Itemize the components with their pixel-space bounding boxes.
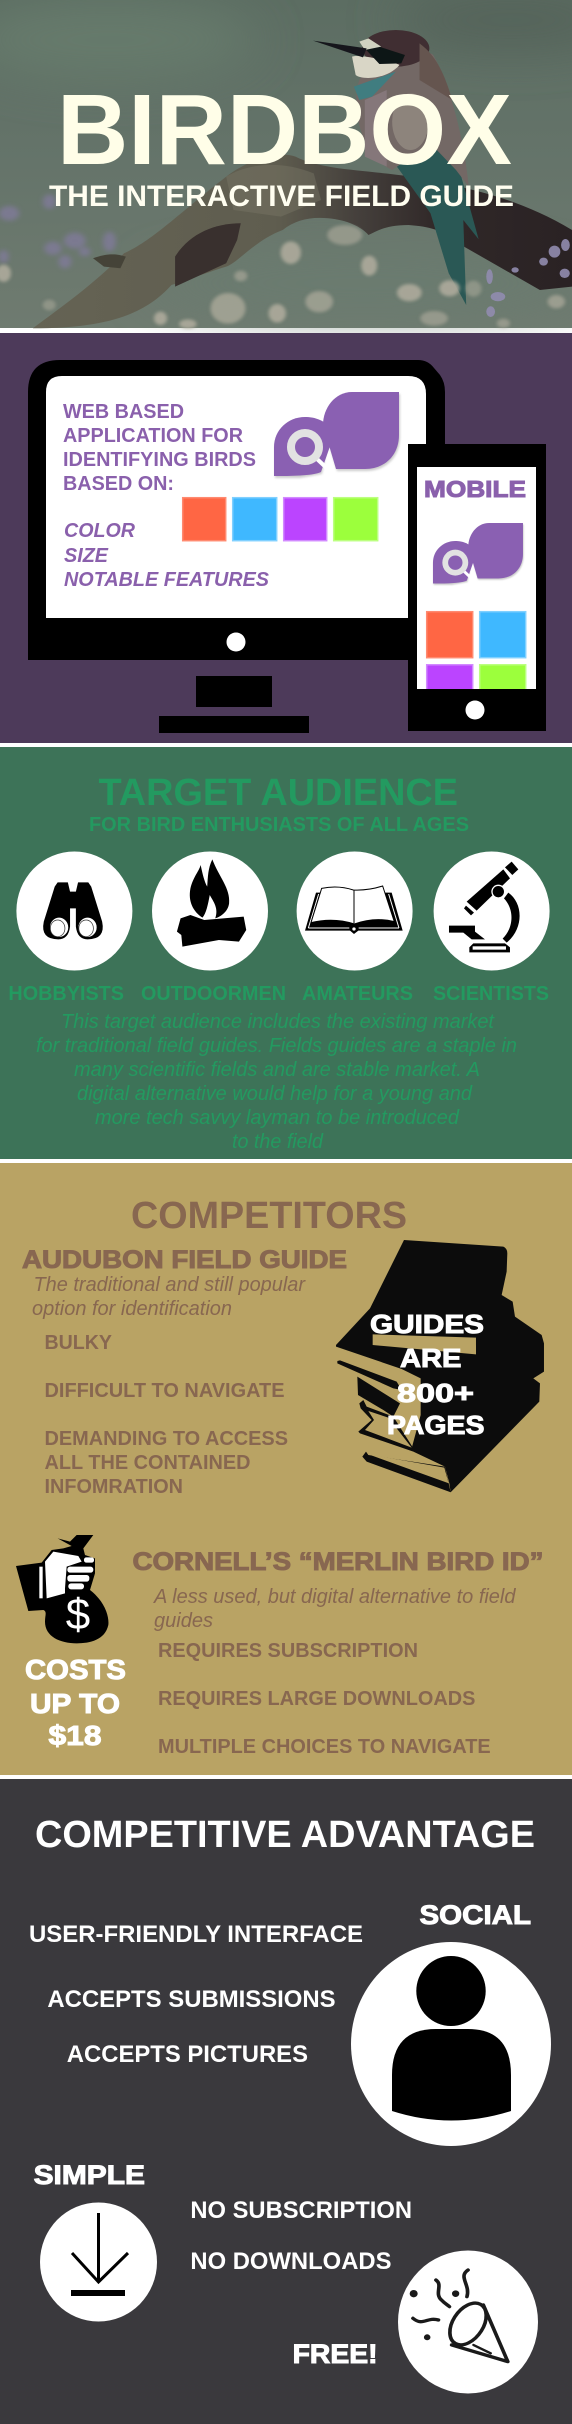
simple label: SIMPLE [34, 2160, 145, 2190]
free label: FREE! [293, 2339, 378, 2369]
audience labels: HOBBYISTS [8, 982, 124, 1005]
icon: scientists microscope [434, 852, 550, 970]
audience description: more tech savvy layman to be introduced [95, 1107, 460, 1129]
audubon drawbacks: DIFFICULT TO NAVIGATE [44, 1380, 284, 1402]
photo: bird on a branch [0, 0, 572, 329]
icon: birdbox logo small [433, 523, 524, 585]
audience description [36, 1011, 517, 1153]
audubon drawbacks: DEMANDING TO ACCESS [44, 1428, 288, 1450]
audience description: to the field [232, 1131, 324, 1153]
merlin drawbacks: REQUIRES LARGE DOWNLOADS [158, 1688, 475, 1710]
icon: hobbyists binoculars [16, 852, 132, 970]
callout: cost: UP TO [30, 1688, 120, 1719]
icon: amateurs open book [297, 852, 413, 970]
description text: SIZE [64, 544, 109, 567]
audience description: many scientific fields and are stable market. A [74, 1059, 480, 1081]
icon: stack of books [336, 1240, 544, 1492]
subtitle: THE INTERACTIVE FIELD GUIDE [49, 180, 514, 213]
icon: desktop monitor [28, 360, 445, 733]
title: BIRDBOX [57, 74, 512, 186]
simple features: NO SUBSCRIPTION [190, 2197, 412, 2224]
description text: NOTABLE FEATURES [64, 568, 269, 591]
icon: money bag [16, 1535, 108, 1643]
social label: SOCIAL [420, 1900, 531, 1930]
audubon drawbacks: ALL THE CONTAINED [44, 1452, 250, 1474]
audubon description: option for identification [32, 1298, 232, 1320]
heading: COMPETITORS [131, 1195, 407, 1237]
colour swatches [183, 498, 378, 541]
audubon description [32, 1274, 306, 1320]
merlin drawbacks: MULTIPLE CHOICES TO NAVIGATE [158, 1736, 491, 1758]
callout: page count: GUIDES [370, 1309, 484, 1339]
description text: COLOR [64, 519, 135, 542]
merlin drawbacks: REQUIRES SUBSCRIPTION [158, 1640, 418, 1662]
social features [29, 1921, 363, 2068]
simple features: NO DOWNLOADS [190, 2248, 392, 2275]
icon: mobile phone [408, 444, 546, 731]
audubon drawbacks: BULKY [44, 1332, 113, 1354]
description text: APPLICATION FOR [63, 424, 243, 447]
panel: target audience [0, 747, 572, 1159]
flowers [0, 225, 565, 329]
dollar sign: $ [66, 1590, 90, 1639]
callout: cost [25, 1654, 126, 1751]
callout: cost: COSTS [25, 1654, 126, 1685]
audience labels: SCIENTISTS [433, 982, 549, 1005]
icon: party popper [398, 2250, 538, 2394]
merlin description: A less used, but digital alternative to field [153, 1586, 516, 1608]
audubon heading: AUDUBON FIELD GUIDE [22, 1246, 347, 1274]
description text: WEB BASED [63, 400, 184, 423]
description text: BASED ON: [63, 472, 174, 495]
description text [63, 400, 269, 591]
audubon description: The traditional and still popular [34, 1274, 306, 1296]
audience description: for traditional field guides. Fields guides are a staple in [36, 1035, 517, 1057]
hero banner [0, 0, 572, 329]
audubon drawbacks: INFOMRATION [44, 1476, 183, 1498]
callout: page count: PAGES [387, 1410, 484, 1440]
audience labels [8, 982, 549, 1005]
panel: competitors [0, 1163, 572, 1775]
mobile swatches [427, 612, 526, 689]
heading: COMPETITIVE ADVANTAGE [35, 1814, 535, 1856]
audubon drawbacks [44, 1332, 288, 1498]
audience description: This target audience includes the existing market [61, 1011, 495, 1033]
social features: ACCEPTS SUBMISSIONS [47, 1986, 336, 2013]
icon: download arrow [40, 2202, 157, 2322]
callout: cost: $18 [48, 1720, 102, 1751]
audience labels: OUTDOORMEN [141, 982, 286, 1005]
description text: IDENTIFYING BIRDS [63, 448, 256, 471]
icon: person [351, 1942, 551, 2146]
icon: outdoormen campfire [152, 852, 268, 970]
bird [313, 30, 479, 305]
heading: TARGET AUDIENCE [98, 772, 458, 814]
social features: ACCEPTS PICTURES [67, 2041, 308, 2068]
callout: page count: ARE [400, 1343, 462, 1373]
social features: USER-FRIENDLY INTERFACE [29, 1921, 363, 1948]
merlin heading: CORNELL’S “MERLIN BIRD ID” [132, 1548, 544, 1576]
audience description: digital alternative would help for a young and [77, 1083, 473, 1105]
panel: web and mobile application [0, 333, 572, 743]
callout: page count: 800+ [397, 1378, 474, 1408]
merlin description [153, 1586, 516, 1632]
mobile label: MOBILE [424, 476, 526, 502]
merlin description: guides [154, 1610, 213, 1632]
subheading: FOR BIRD ENTHUSIASTS OF ALL AGES [89, 813, 469, 836]
merlin drawbacks [158, 1640, 491, 1758]
icon: birdbox logo [274, 392, 400, 478]
simple features [190, 2197, 412, 2275]
panel: competitive advantage [0, 1779, 572, 2424]
audience labels: AMATEURS [302, 982, 413, 1005]
callout: page count [370, 1309, 484, 1440]
